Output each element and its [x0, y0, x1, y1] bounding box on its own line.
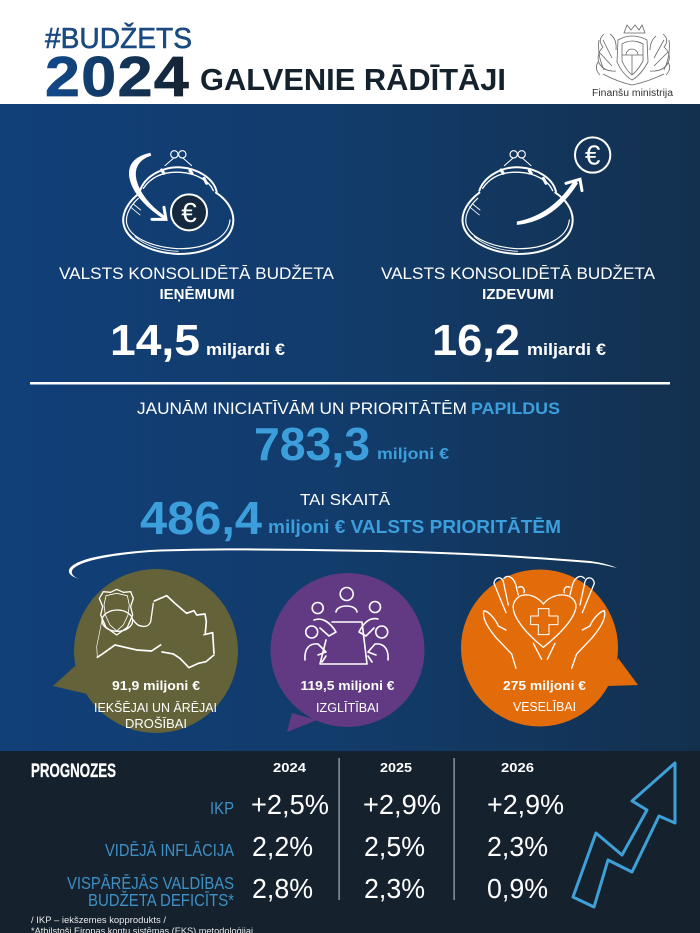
euro coin: €	[181, 197, 197, 228]
brace curve	[69, 548, 617, 579]
values: inflation	[252, 831, 548, 862]
footnotes: / IKP – iekšzemes kopprodukts /	[31, 915, 166, 926]
footnotes	[31, 915, 253, 933]
icon: Latvia map with shield	[97, 589, 214, 668]
number: revenue	[110, 316, 286, 365]
icon: coat of arms	[596, 25, 670, 85]
ministry name: Finanšu ministrija	[592, 88, 673, 99]
header band	[0, 0, 700, 108]
amount: 91,9 miljoni €	[112, 679, 200, 693]
text: revenue label: IEŅĒMUMI	[160, 286, 234, 303]
title: main heading: GALVENIE RĀDĪTĀJI	[200, 62, 506, 97]
values: GDP	[251, 789, 564, 820]
row labels: BUDŽETA DEFICĪTS*	[88, 890, 234, 910]
text: new initiatives: JAUNĀM INICIATĪVĀM UN PRIORITĀTĒM	[137, 400, 467, 418]
values: inflation: 2,3%	[487, 831, 548, 862]
title: hashtag: #BUDŽETS	[45, 22, 192, 55]
euro coin: €	[585, 140, 601, 171]
number: new initiatives: 783,3	[254, 418, 370, 470]
row labels: IKP	[210, 798, 234, 818]
text: expenditure label	[381, 264, 656, 303]
number: expenditure	[432, 316, 607, 365]
text: expenditure label: VALSTS KONSOLIDĒTĀ BUDŽETA	[381, 264, 656, 283]
icon: people around table	[305, 588, 388, 664]
values: deficit: 2,8%	[252, 873, 313, 904]
amount: 275 miljoni €	[503, 679, 586, 693]
title: year: 2024	[45, 45, 190, 108]
arrow out of purse	[517, 179, 582, 224]
values: deficit	[252, 873, 548, 904]
number: new initiatives	[254, 418, 449, 470]
year headers: 2026	[501, 760, 534, 775]
number: new initiatives: miljoni €	[377, 446, 449, 463]
icon: purse with incoming euro	[123, 151, 233, 254]
row labels: VISPĀRĒJĀS VALDĪBAS	[67, 873, 234, 893]
number: expenditure: 16,2	[432, 316, 520, 365]
panel: education	[270, 573, 424, 732]
label: IEKŠĒJAI UN ĀRĒJAI	[94, 700, 217, 715]
label: VESELĪBAI	[513, 699, 576, 714]
text: new initiatives: PAPILDUS	[471, 400, 560, 418]
row labels: VIDĒJĀ INFLĀCIJA	[105, 840, 234, 860]
values: inflation: 2,5%	[364, 831, 425, 862]
row labels	[67, 798, 234, 910]
text: revenue label: VALSTS KONSOLIDĒTĀ BUDŽETA	[59, 264, 335, 283]
icon: purse with outgoing euro	[463, 137, 610, 254]
values: deficit: 2,3%	[364, 873, 425, 904]
icon: hands holding heart	[484, 576, 605, 668]
text: of which: TAI SKAITĀ	[300, 492, 391, 509]
arrow: upward trend	[573, 763, 675, 907]
number: revenue: miljardi €	[206, 340, 286, 359]
year headers: 2025	[380, 760, 412, 775]
amount: 119,5 miljoni €	[300, 679, 395, 693]
values: GDP: +2,9%	[487, 789, 564, 820]
panel: internal and external security	[53, 569, 238, 733]
panel: forecasts	[0, 751, 700, 933]
main blue panel	[0, 104, 700, 752]
label: DROŠĪBAI	[125, 716, 187, 731]
values: deficit: 0,9%	[487, 873, 548, 904]
values: GDP: +2,9%	[363, 789, 441, 820]
year headers: 2024	[273, 760, 307, 775]
label: IZGLĪTĪBAI	[316, 700, 379, 715]
text: expenditure label: IZDEVUMI	[482, 286, 554, 303]
text: revenue label	[59, 264, 335, 303]
number: state priorities: miljoni € VALSTS PRIORITĀTĒM	[268, 517, 561, 537]
panel: health	[461, 570, 638, 726]
year headers	[273, 760, 534, 775]
euro coin	[575, 137, 610, 173]
number: expenditure: miljardi €	[527, 340, 607, 359]
values: GDP: +2,5%	[251, 789, 329, 820]
heading: PROGNOZES	[31, 761, 116, 782]
number: state priorities: 486,4	[140, 492, 262, 544]
values: inflation: 2,2%	[252, 831, 313, 862]
number: state priorities	[140, 492, 561, 544]
label	[94, 700, 217, 731]
arrow into purse	[129, 153, 166, 219]
number: revenue: 14,5	[110, 316, 200, 365]
